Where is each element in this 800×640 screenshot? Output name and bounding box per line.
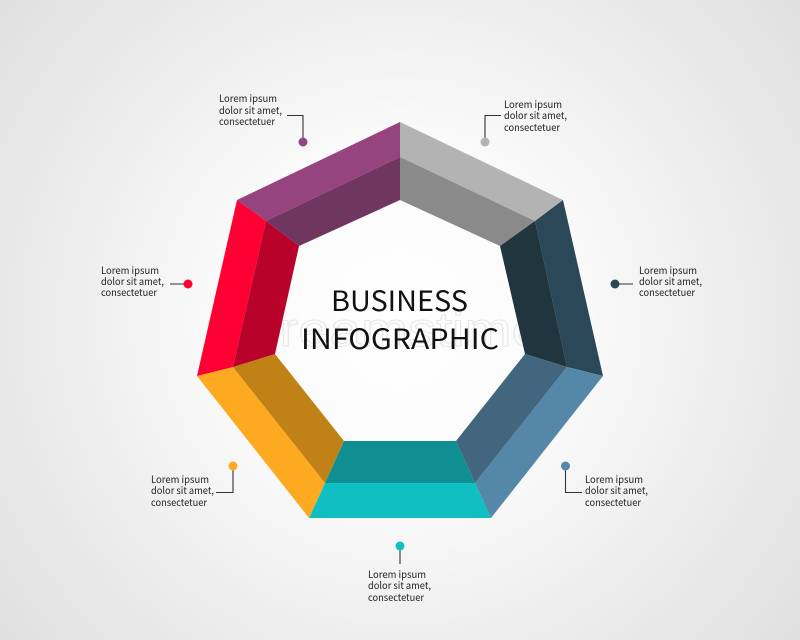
- callout: teal: dolor sit amet,: [368, 577, 431, 592]
- callout: steel blue: consectetuer: [585, 494, 641, 509]
- callout: steel blue: dolor sit amet,: [585, 482, 648, 497]
- callout: purple: [219, 90, 308, 146]
- callout: gray: consectetuer: [504, 119, 560, 134]
- callout: orange: dolor sit amet,: [151, 482, 214, 497]
- segment: orange: [197, 354, 344, 518]
- callout: gray: Lorem ipsum: [504, 96, 562, 111]
- callout: steel blue: Lorem ipsum: [585, 471, 643, 486]
- title: [301, 280, 499, 358]
- callout: steel blue: [561, 462, 648, 509]
- callout: navy: Lorem ipsum: [639, 262, 697, 277]
- title: INFOGRAPHIC: [301, 318, 499, 358]
- callout: red: Lorem ipsum: [101, 262, 159, 277]
- segment: teal: [309, 441, 491, 518]
- callout: red: consectetuer: [101, 284, 157, 299]
- callout: gray: [480, 96, 567, 146]
- watermark: dreamstime: [248, 304, 543, 357]
- callout: navy: dolor sit amet,: [639, 273, 702, 288]
- callout: navy: [610, 262, 702, 299]
- callout: purple: Lorem ipsum: [219, 90, 277, 105]
- callout: gray: dolor sit amet,: [504, 107, 567, 122]
- callout: navy: consectetuer: [639, 284, 695, 299]
- segment: navy: [500, 200, 603, 376]
- callout: teal: Lorem ipsum: [368, 566, 426, 581]
- heptagon ring: [197, 122, 603, 518]
- callout: purple: dolor sit amet,: [219, 102, 282, 117]
- callout: red: dolor sit amet,: [101, 273, 164, 288]
- segment: steel blue: [456, 354, 603, 518]
- callout: teal: [368, 542, 431, 604]
- segment: purple: [237, 122, 400, 246]
- title: BUSINESS: [331, 280, 468, 320]
- callout: orange: Lorem ipsum: [151, 471, 209, 486]
- callout: red: [101, 262, 192, 299]
- callout: orange: consectetuer: [151, 494, 207, 509]
- segment: red: [197, 200, 299, 376]
- callout: purple: consectetuer: [219, 113, 275, 128]
- callout: orange: [151, 462, 238, 509]
- segment: gray: [400, 122, 563, 246]
- callout: teal: consectetuer: [368, 589, 424, 604]
